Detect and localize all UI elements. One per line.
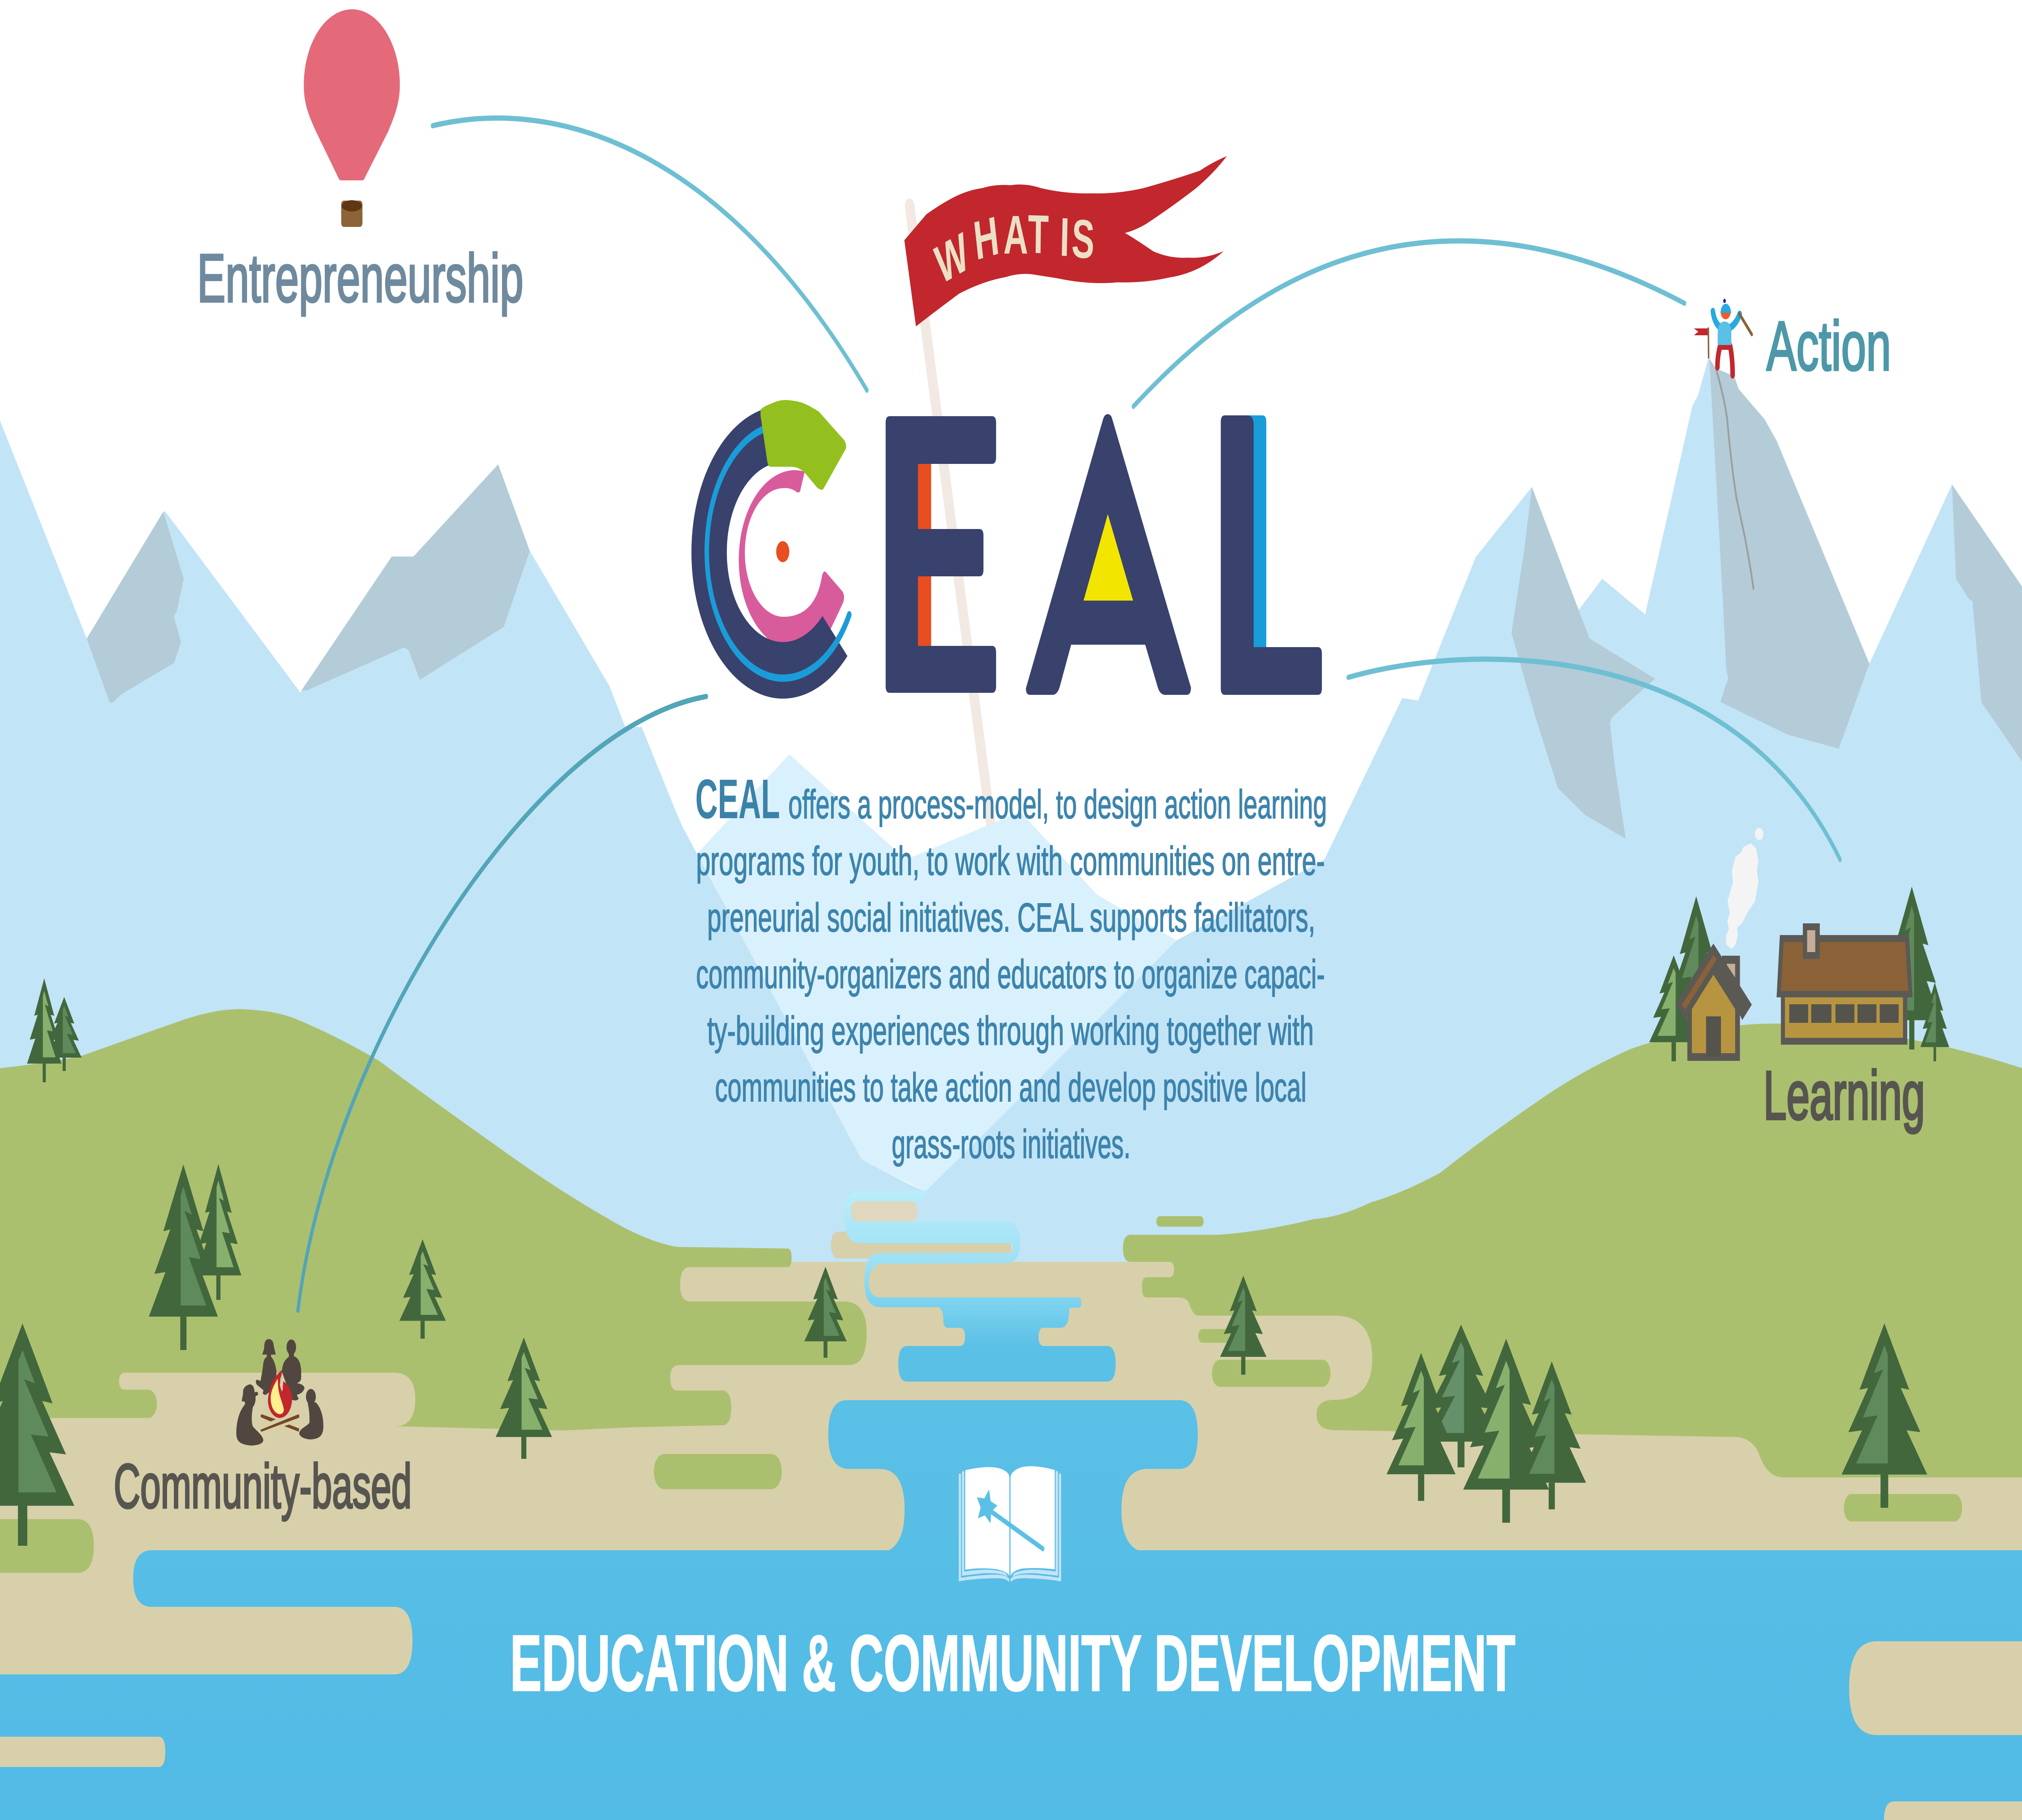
trees: left pair (149, 1164, 241, 1350)
flag pole (909, 206, 992, 833)
connector: action (1133, 241, 1685, 406)
connector: entrepreneurship (432, 118, 867, 390)
letter A (1026, 414, 1191, 695)
CEAL lead word: CEAL (695, 768, 780, 830)
tree: beside campfire (496, 1337, 552, 1459)
icon: climber on summit (1694, 299, 1752, 375)
trees: right cluster (1387, 1325, 1586, 1523)
icon: campfire with people (236, 1339, 324, 1445)
green patches (0, 1216, 1962, 1573)
trees: left hill top (27, 978, 82, 1082)
connector: learning (1348, 659, 1840, 859)
people (236, 1339, 324, 1445)
description text block: ty-building experiences through working together with (707, 1008, 1314, 1054)
trees behind small house (1649, 896, 1724, 1061)
climbing rope (1716, 368, 1753, 590)
sand bar by the river (831, 1232, 1012, 1259)
description text block: community-organizers and educators to organize capaci- (696, 952, 1325, 997)
icon: red flag with WHAT IS (904, 156, 1227, 326)
tree: by river right (1220, 1276, 1267, 1375)
flame (268, 1370, 292, 1418)
label: Learning: Learning (1764, 1058, 1925, 1134)
mountain shadows (87, 358, 2022, 839)
chimney smoke (1726, 828, 1764, 949)
tree behind large house (1883, 887, 1940, 1050)
description text block: communities to take action and develop positive local (715, 1065, 1307, 1110)
label: Action: Action (1766, 307, 1891, 385)
mountains (0, 358, 2022, 1294)
sand strip near campfire (119, 1373, 415, 1426)
label: Entrepreneurship: Entrepreneurship (197, 239, 523, 316)
icon: small house (1675, 944, 1752, 1061)
tree: hillside (400, 1239, 446, 1339)
winding river (844, 1191, 1116, 1382)
description text block: programs for youth, to work with communities on entre- (696, 838, 1325, 884)
tree: far left (0, 1323, 74, 1546)
bottom-right sand bars (0, 1641, 2022, 1820)
sea (0, 1550, 2022, 1820)
logo: CEAL (707, 400, 1322, 695)
icon: hot air balloon (304, 9, 400, 227)
description text block: offers a process-model, to design action learning (788, 782, 1327, 827)
tree: by river left (804, 1267, 847, 1358)
flag text: WHAT IS (930, 203, 1096, 296)
pale valley behind text (683, 754, 1176, 1191)
right green hill (1123, 1024, 2022, 1477)
connector: community-based (298, 696, 706, 1310)
letter L (1221, 415, 1322, 695)
upper pale sand bar (851, 1201, 917, 1221)
description text block: preneurial social initiatives. CEAL supports facilitators, (707, 895, 1315, 940)
tree: far right (1842, 1323, 1927, 1508)
sand ground (0, 1262, 2022, 1707)
tree: beside large house (1920, 982, 1949, 1061)
title: EDUCATION & COMMUNITY DEVELOPMENT (510, 1618, 1516, 1708)
letter E (886, 416, 996, 693)
description text block (695, 768, 1327, 1167)
label: Community-based: Community-based (114, 1452, 412, 1522)
letter C (707, 400, 849, 678)
logs (260, 1414, 299, 1432)
left green hill (0, 1009, 867, 1431)
mountain range (0, 358, 2022, 1294)
icon: open book with wand (959, 1466, 1061, 1582)
icon: large house (1777, 923, 1912, 1045)
description text block: grass-roots initiatives. (892, 1122, 1131, 1167)
bottom-left sand bar (0, 1737, 165, 1767)
river mouth (828, 1400, 1198, 1553)
